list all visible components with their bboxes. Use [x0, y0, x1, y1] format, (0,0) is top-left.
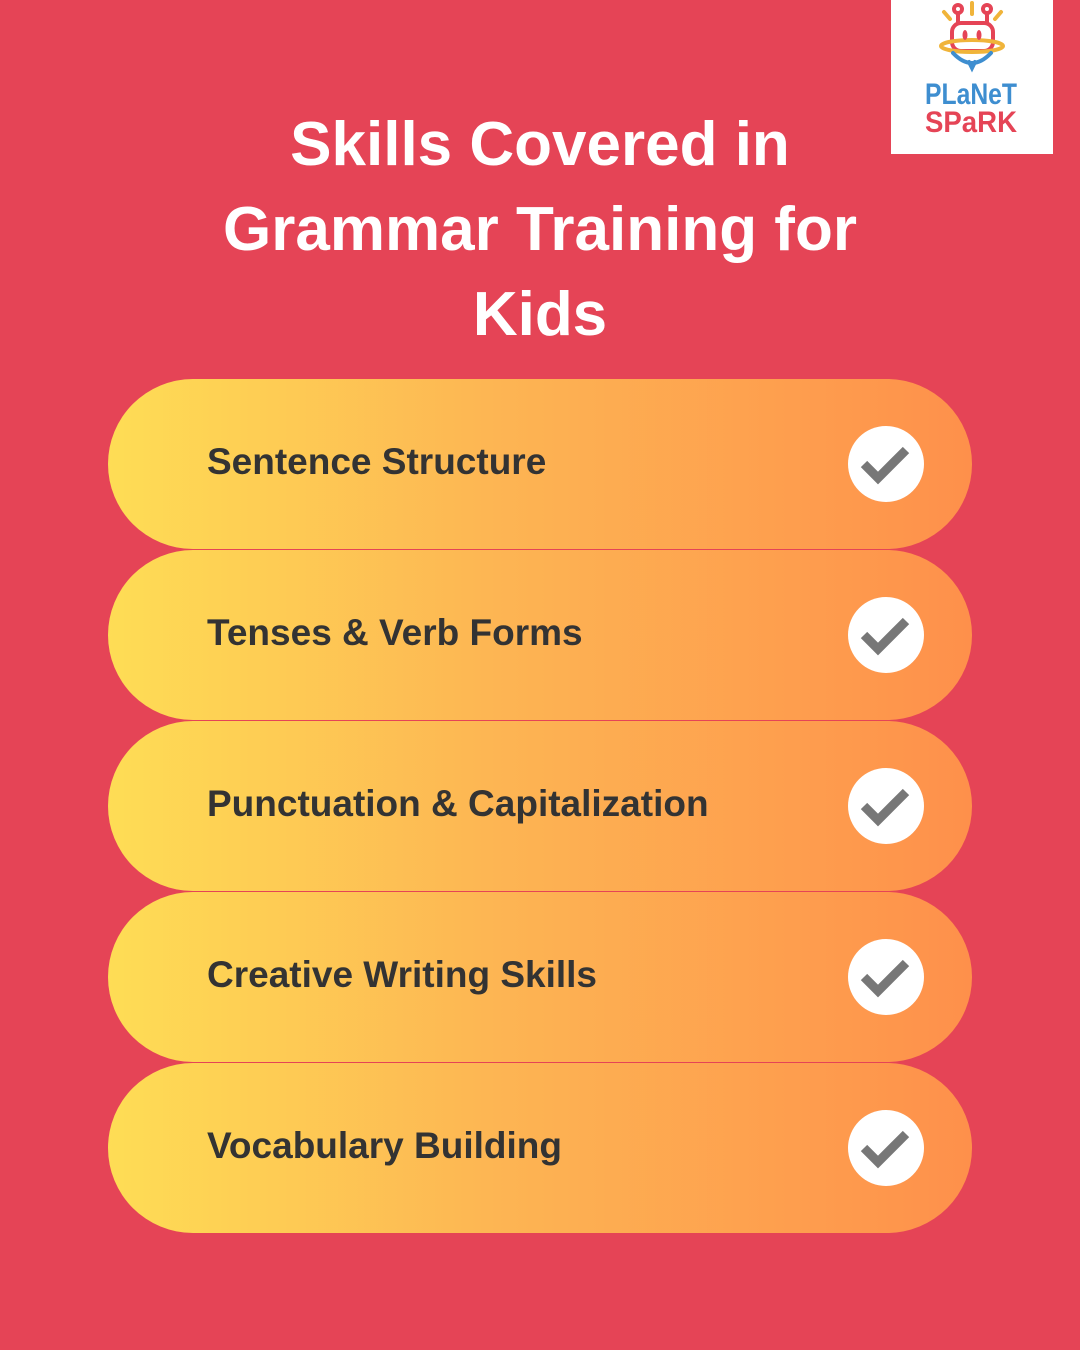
- pill: Sentence Structure: [108, 379, 972, 549]
- logo: [891, 0, 1053, 154]
- pill: Sentence Structure: Sentence Structure: [207, 441, 546, 482]
- pill: Vocabulary: [108, 1063, 972, 1233]
- title: Skills Covered in Grammar Training for Kids: [223, 110, 857, 349]
- pill: Vocabulary: Vocabulary Building: [207, 1125, 562, 1166]
- pill: Tenses: Tenses & Verb Forms: [207, 612, 583, 653]
- pill: Punctuation: [108, 721, 972, 891]
- logo: SPaRK: [925, 106, 1017, 139]
- pill: Punctuation: Punctuation & Capitalization: [207, 783, 709, 824]
- pill: Creative Writing: [108, 892, 972, 1062]
- logo: PLaNeT: [925, 78, 1017, 111]
- pill: Tenses: [108, 550, 972, 720]
- pill: Creative Writing: Creative Writing Skills: [207, 954, 597, 995]
